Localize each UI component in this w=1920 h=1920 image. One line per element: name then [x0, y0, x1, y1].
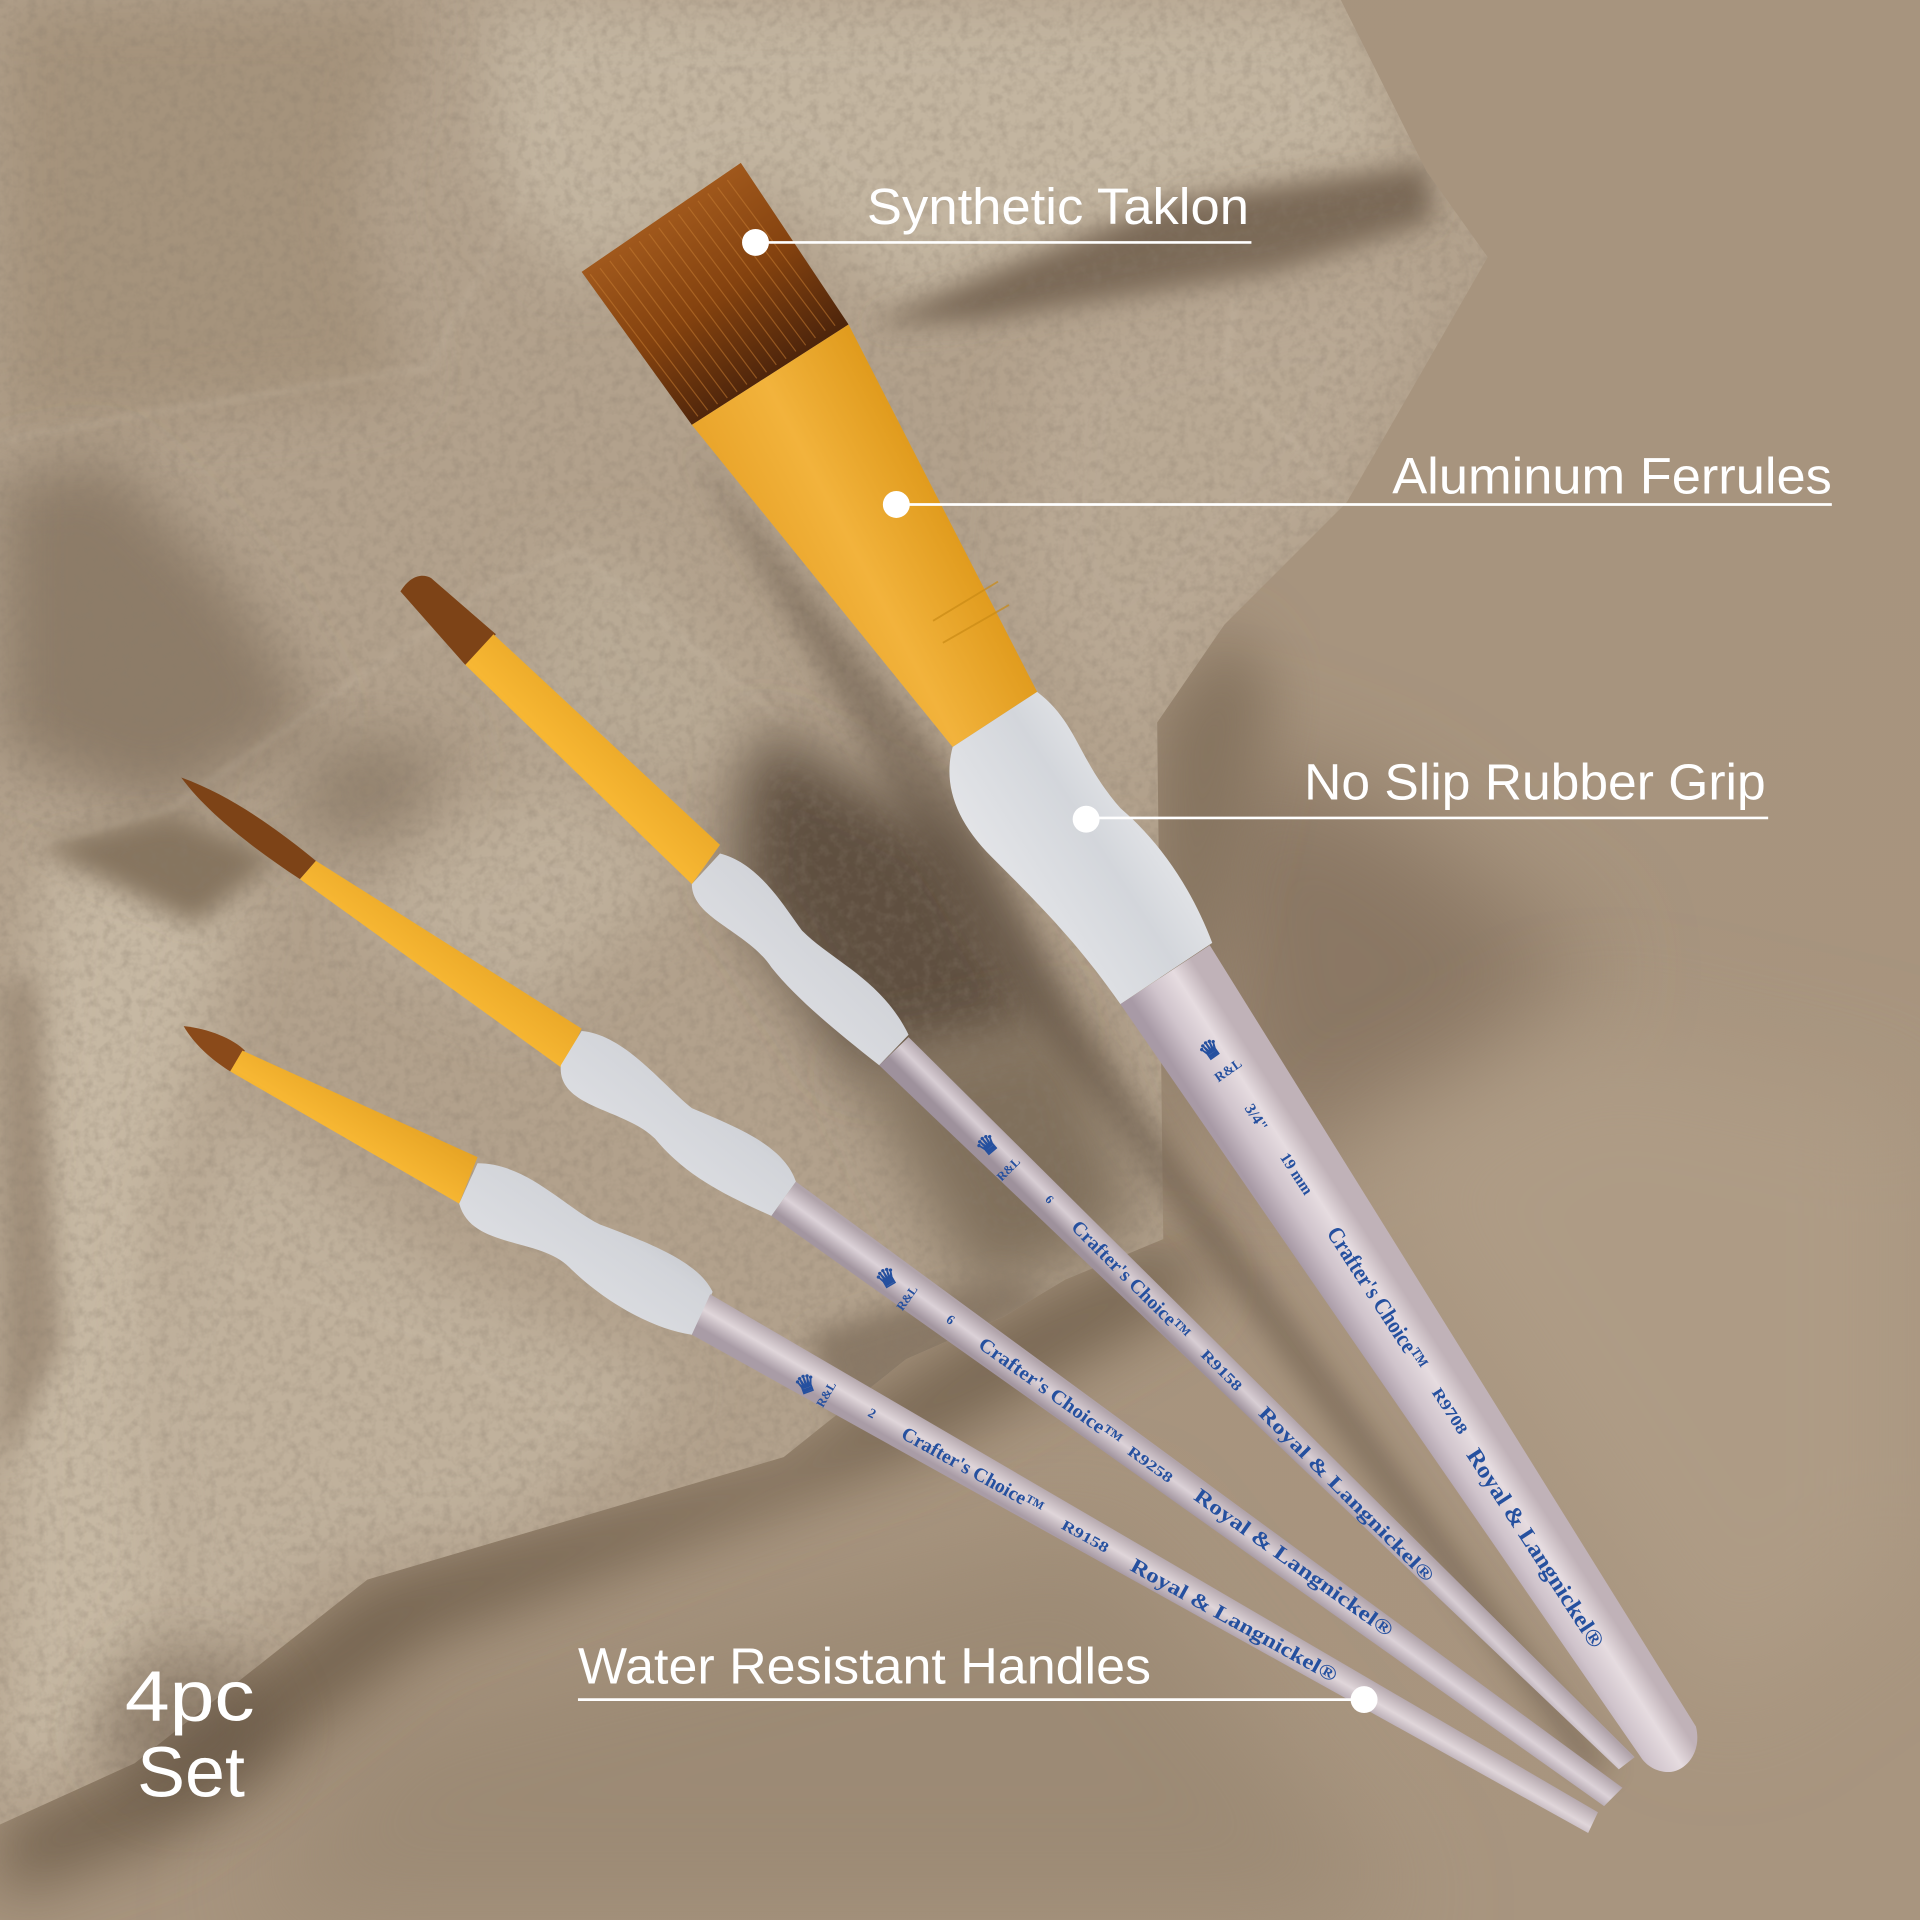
rubber grip: [949, 692, 1212, 1004]
handle print: R9158: [1058, 1518, 1111, 1557]
handle print: ♛: [871, 1261, 904, 1296]
handle: [692, 1294, 1598, 1833]
rubber grip: [459, 1163, 713, 1335]
bristles: [181, 778, 316, 879]
handle print: [871, 1261, 1398, 1642]
callout: Synthetic Taklon: [742, 177, 1251, 256]
handle print: ♛: [971, 1128, 1005, 1163]
handle print: Crafter's Choice™: [898, 1424, 1047, 1519]
handle print: 19 mm: [1276, 1150, 1316, 1198]
handle print: R9258: [1124, 1444, 1175, 1487]
rubber grip: [692, 853, 909, 1065]
taklon bristles: [582, 163, 849, 425]
handle print: Royal & Langnickel®: [1190, 1483, 1398, 1642]
handle print: R&L: [893, 1283, 921, 1313]
handle print: Royal & Langnickel®: [1254, 1403, 1438, 1587]
brush: small round: [184, 1026, 1598, 1833]
brush: medium round: [181, 778, 1622, 1806]
handle print: Crafter's Choice™: [1321, 1222, 1433, 1375]
handle print: R&L: [994, 1155, 1023, 1184]
ferrule: [300, 861, 582, 1069]
handle print: [1194, 1033, 1609, 1653]
handle print: 6: [1042, 1192, 1057, 1206]
handle print: ♛: [791, 1369, 821, 1402]
brush shadow: [686, 441, 1616, 1776]
brush: small flat: [400, 576, 1635, 1769]
crumpled paper sheet: [0, 0, 1488, 1824]
handle print: R9708: [1428, 1385, 1470, 1438]
crease lines: [0, 0, 1347, 1592]
ferrule: [692, 324, 1037, 747]
handle print: 6: [944, 1312, 958, 1328]
callout: No Slip Rubber Grip: No Slip Rubber Grip: [1304, 753, 1766, 811]
callout: Water Resistant Handles: Water Resistant Handles: [578, 1637, 1151, 1695]
brush: large flat: [582, 163, 1697, 1776]
handle print: 3/4": [1241, 1101, 1271, 1135]
badge: 4pc Set: Set: [137, 1733, 245, 1812]
handle print: R&L: [1211, 1055, 1245, 1085]
handle print: Royal & Langnickel®: [1461, 1444, 1609, 1653]
handle print: R9158: [1197, 1347, 1245, 1395]
handle print: R&L: [813, 1379, 839, 1410]
handle: [879, 1037, 1635, 1769]
ferrule: [465, 634, 720, 884]
handle print: Crafter's Choice™: [1067, 1217, 1194, 1344]
bristles: [400, 576, 496, 665]
callout: Aluminum Ferrules: [883, 446, 1832, 518]
bristles: [184, 1026, 245, 1071]
callout: Aluminum Ferrules: Aluminum Ferrules: [1392, 446, 1832, 504]
ferrule: [230, 1051, 478, 1204]
handle print: [971, 1128, 1438, 1587]
handle print: [791, 1369, 1342, 1687]
handle print: Royal & Langnickel®: [1127, 1553, 1342, 1687]
handle: [771, 1182, 1622, 1806]
callout: Synthetic Taklon: Synthetic Taklon: [867, 177, 1249, 235]
badge: 4pc Set: 4pc: [125, 1657, 255, 1736]
callout: Water Resistant Handles: [578, 1637, 1378, 1713]
badge: 4pc Set: [104, 1653, 276, 1812]
handle print: 2: [865, 1405, 879, 1422]
rubber grip: [561, 1031, 796, 1216]
handle print: ♛: [1194, 1033, 1228, 1068]
handle print: Crafter's Choice™: [974, 1334, 1126, 1451]
handle: [1120, 945, 1697, 1772]
callout: No Slip Rubber Grip: [1073, 753, 1768, 833]
